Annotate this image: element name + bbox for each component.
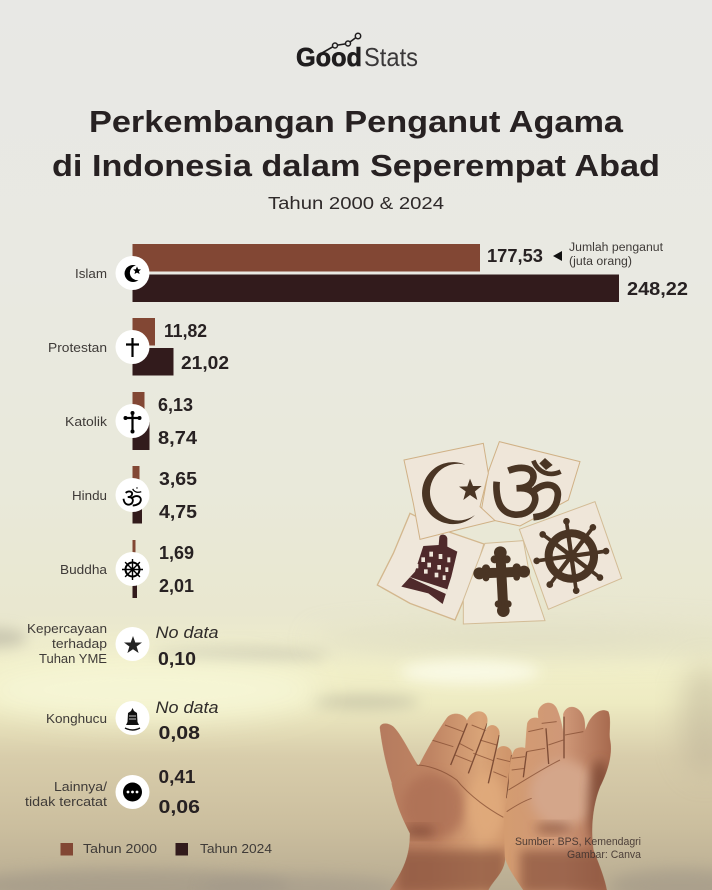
chart row: Protestan: 11,82 <box>164 321 207 341</box>
chart row: Konghucu: 0,08 <box>158 723 200 743</box>
source note <box>515 836 641 861</box>
title <box>52 104 660 183</box>
chart row: Protestan: 21,02 <box>181 353 229 373</box>
paper: crescent and star <box>404 443 495 539</box>
chart row: Kepercayaan terhadap Tuhan YME: terhadap <box>52 637 107 651</box>
source note: Sumber: BPS, Kemendagri <box>515 836 641 848</box>
chart row: Lainnya / tidak tercatat: tidak tercatat <box>25 795 108 809</box>
title: Perkembangan Penganut Agama <box>89 104 624 139</box>
chart row: Katolik: 8,74 <box>158 428 197 448</box>
right hand <box>503 690 613 890</box>
logo: GoodStats: Good <box>296 42 362 72</box>
annotation: jumlah penganut <box>553 242 664 268</box>
chart row: Buddha: 2,01 <box>159 576 194 596</box>
chart row: Hindu: Hindu <box>72 489 107 503</box>
chart row: Konghucu: No data <box>156 698 218 717</box>
chart row: Kepercayaan terhadap Tuhan YME: No data <box>156 623 218 642</box>
chart row: Lainnya / tidak tercatat <box>25 767 200 817</box>
illustration: paper religious symbols <box>377 442 622 624</box>
annotation: jumlah penganut: Jumlah penganut <box>569 242 664 254</box>
paper: om <box>480 442 580 526</box>
paper: cross <box>463 541 545 624</box>
chart row: Katolik: Katolik <box>65 415 108 429</box>
left hand <box>380 711 512 890</box>
chart row: Buddha: 1,69 <box>159 543 194 563</box>
chart row: Protestan <box>48 318 229 376</box>
chart row: Kepercayaan terhadap Tuhan YME: Kepercayaan <box>27 622 107 636</box>
chart row: Kepercayaan terhadap Tuhan YME: 0,10 <box>158 649 196 669</box>
logo: GoodStats <box>296 33 418 72</box>
chart row: Buddha: Buddha <box>60 563 107 577</box>
source note: Gambar: Canva <box>567 849 641 861</box>
paper: bell <box>377 513 484 620</box>
chart row: Islam: Islam <box>75 267 107 281</box>
chart row: Lainnya / tidak tercatat: 0,06 <box>158 797 200 817</box>
chart row: Kepercayaan terhadap Tuhan YME <box>27 622 218 669</box>
chart row: Lainnya / tidak tercatat: Lainnya/ <box>54 780 108 794</box>
chart row: Buddha <box>60 540 194 598</box>
chart row: Hindu: 4,75 <box>159 502 197 522</box>
annotation: jumlah penganut: (juta orang) <box>569 256 632 268</box>
chart row: Lainnya / tidak tercatat: 0,41 <box>158 767 196 787</box>
chart row: Kepercayaan terhadap Tuhan YME: Tuhan YME <box>39 652 107 666</box>
legend: Tahun 2000 <box>83 841 157 856</box>
chart row: Katolik: 6,13 <box>158 395 193 415</box>
chart row: Islam: 177,53 <box>487 246 543 266</box>
chart row: Konghucu <box>46 698 218 743</box>
chart row: Hindu <box>72 466 197 524</box>
legend: Tahun 2024 <box>200 841 272 856</box>
chart row: Protestan: Protestan <box>48 341 107 355</box>
logo: GoodStats: Stats <box>364 42 418 72</box>
legend <box>60 841 272 856</box>
chart row: Katolik <box>65 392 197 450</box>
chart row: Islam: 248,22 <box>627 279 688 299</box>
title: di Indonesia dalam Seperempat Abad <box>52 148 660 183</box>
chart row: Islam <box>75 244 688 302</box>
paper: dharma wheel <box>519 502 622 609</box>
subtitle: Tahun 2000 & 2024 <box>268 193 444 213</box>
illustration: praying hands <box>373 690 613 890</box>
chart row: Konghucu: Konghucu <box>46 712 107 726</box>
chart row: Hindu: 3,65 <box>159 469 197 489</box>
